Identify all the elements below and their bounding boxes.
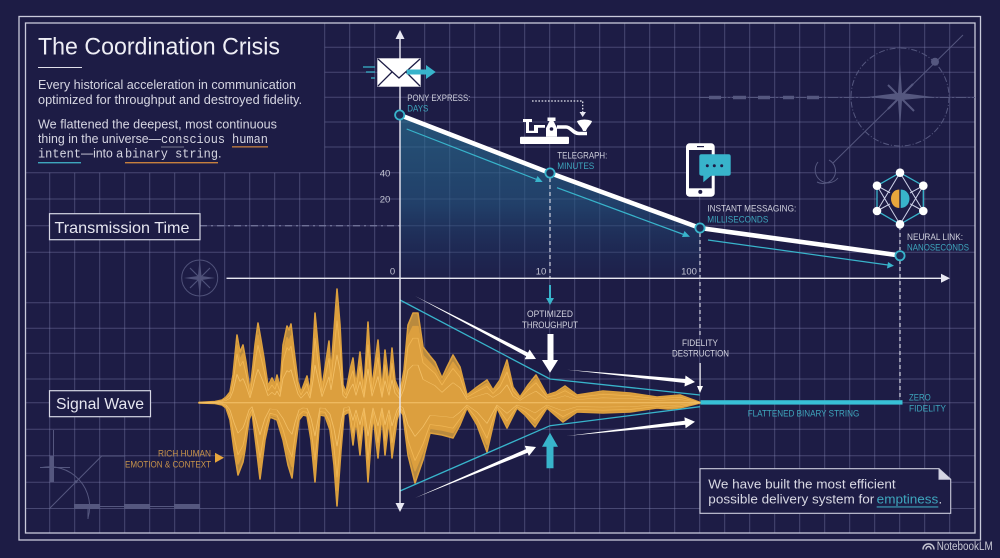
label: fidelity destruction: [672, 338, 729, 359]
thesis paragraph: We flattened the deepest, most continuous: [38, 116, 277, 132]
axis tick labels: 100: [681, 266, 697, 278]
label: neural link: [907, 232, 969, 253]
watermark: NotebookLM: NotebookLM: [937, 541, 993, 553]
callout: rich human emotion: EMOTION & CONTEXT: [125, 460, 212, 470]
callout: emptiness: We have built the most efficient: [708, 476, 896, 491]
axis tick labels: 10: [536, 266, 546, 278]
axis tick labels: 40: [380, 168, 390, 180]
thesis paragraph: .: [218, 146, 222, 160]
label: fidelity destruction: FIDELITY: [682, 338, 718, 348]
arrow: small teal down: [546, 285, 554, 305]
thesis paragraph: —into a: [81, 146, 124, 160]
callout: emptiness: possible delivery system for: [708, 491, 875, 506]
label: pony express: PONY EXPRESS:: [407, 93, 470, 103]
callout: emptiness: [700, 469, 951, 513]
thesis paragraph: human: [232, 132, 268, 147]
label: neural link: NEURAL LINK:: [907, 232, 963, 242]
label: flattened binary string: FLATTENED BINARY STRING: [748, 409, 859, 419]
arrow: fidelity destruction: [697, 363, 703, 393]
intro paragraph: optimized for throughput and destroyed fidelity.: [38, 92, 302, 107]
decoration: top right compass: [700, 35, 975, 184]
dashed connector: transmission time: [200, 225, 400, 227]
signal waveform: [199, 289, 700, 506]
label: instant messaging: [707, 204, 796, 224]
funnel envelope: [400, 300, 700, 491]
label: optimized throughput: OPTIMIZED: [527, 309, 573, 319]
label: telegraph: MINUTES: [557, 161, 594, 171]
label: transmission time: [50, 214, 200, 240]
label: zero fidelity: FIDELITY: [909, 403, 946, 413]
callout: emptiness: emptiness: [877, 491, 939, 506]
callout: emptiness: .: [938, 491, 942, 506]
intro paragraph: [38, 77, 302, 107]
axis tick labels: 20: [380, 194, 390, 206]
flattened binary string: [700, 400, 902, 405]
label: zero fidelity: ZERO: [909, 393, 931, 403]
callout: rich human emotion: RICH HUMAN: [158, 449, 211, 459]
icon: telegraph key: [520, 101, 592, 144]
label: instant messaging: INSTANT MESSAGING:: [707, 204, 796, 214]
nodes: [395, 110, 905, 260]
label: telegraph: [557, 150, 607, 171]
decoration: small compass: [182, 258, 218, 296]
title: The Coordination Crisis: [38, 34, 280, 60]
thesis paragraph: binary string: [125, 146, 218, 162]
label: signal wave: [50, 391, 150, 417]
icon: neural link brain network: [873, 168, 928, 229]
dashed drop lines: [550, 178, 900, 398]
thesis paragraph: [38, 116, 277, 163]
transmission time line: [400, 115, 900, 256]
label: instant messaging: MILLISECONDS: [707, 214, 768, 224]
axis tick labels: 0: [390, 266, 395, 278]
thesis paragraph: intent: [38, 146, 81, 162]
label: optimized throughput: [522, 309, 579, 330]
label: pony express: [407, 93, 470, 114]
thesis paragraph: conscious: [161, 132, 225, 147]
arrow: teal compress up: [542, 433, 558, 468]
label: transmission time: Transmission Time: [54, 220, 190, 237]
label: fidelity destruction: DESTRUCTION: [672, 349, 729, 359]
area under transmission line: [400, 116, 700, 278]
icon: phone with chat bubble: [686, 143, 731, 197]
white compression arrows: [415, 296, 695, 498]
label: signal wave: Signal Wave: [56, 396, 144, 413]
axis tick labels: [380, 168, 697, 278]
axes: [226, 30, 950, 512]
callout: rich human emotion: [125, 449, 224, 470]
thesis paragraph: thing in the universe—: [38, 131, 161, 146]
icon: envelope: [363, 58, 436, 87]
intro paragraph: Every historical acceleration in communication: [38, 77, 296, 92]
label: pony express: DAYS: [407, 104, 428, 114]
title rule: [38, 67, 82, 68]
decoration: bottom left drafting marks: [40, 430, 200, 519]
label: optimized throughput: THROUGHPUT: [522, 320, 579, 330]
arrow: white compress down: [542, 334, 558, 373]
label: zero fidelity: [909, 393, 946, 413]
label: neural link: NANOSECONDS: [907, 243, 969, 253]
trend arrows: [407, 129, 894, 268]
label: telegraph: TELEGRAPH:: [557, 150, 607, 160]
